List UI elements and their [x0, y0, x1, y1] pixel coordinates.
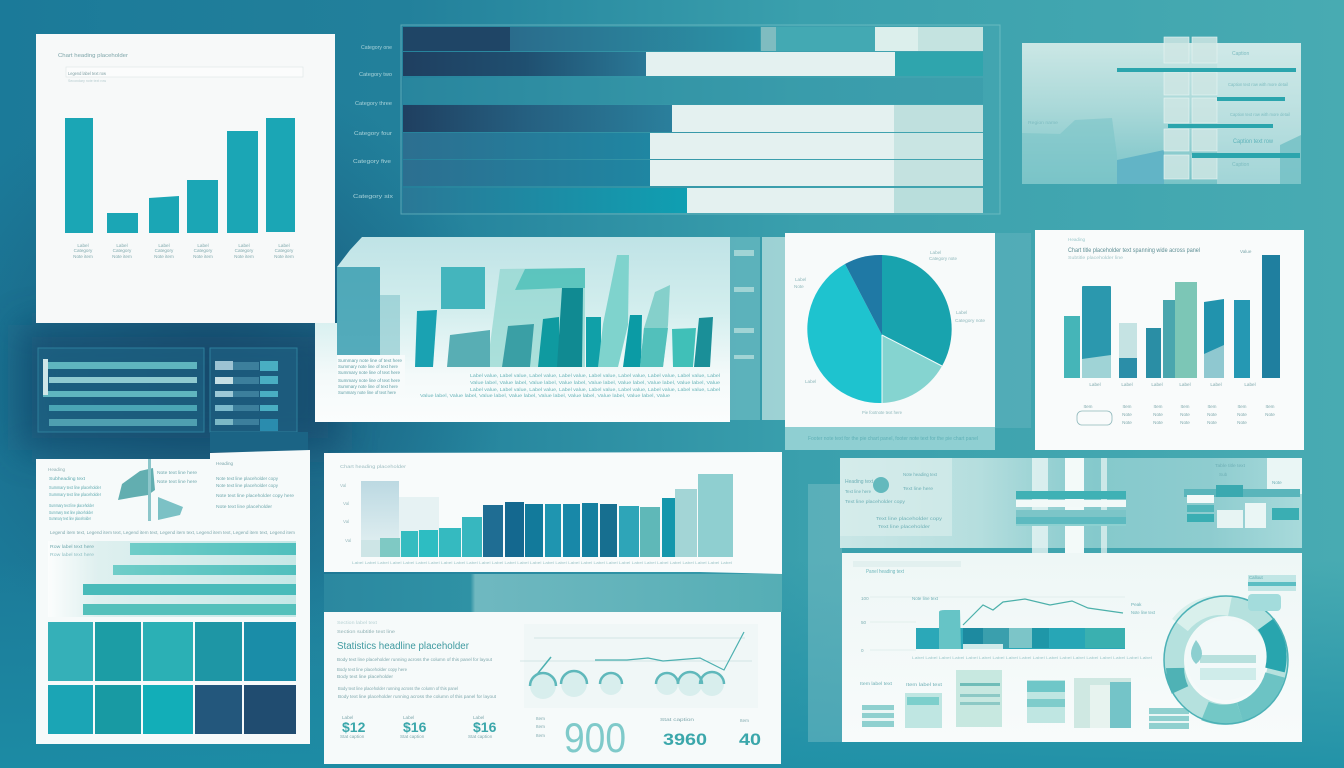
intro text: Heading — [48, 467, 66, 472]
axis captions: Label — [1089, 382, 1101, 387]
stat captions: Item — [536, 724, 545, 729]
mini table right — [1184, 485, 1300, 528]
table text: Note — [1272, 480, 1282, 485]
axis captions: Item — [1266, 404, 1275, 409]
globe icon — [873, 477, 889, 493]
axis captions: Item — [1208, 404, 1217, 409]
line chart — [520, 632, 752, 683]
intro text: Summary text line placeholder — [49, 492, 101, 497]
panel: middle wide column chart — [324, 452, 782, 574]
columns — [361, 474, 733, 557]
axis captions: Note — [1180, 420, 1190, 425]
column value labels: Value label, Value label, Value label, Value label, Value label, Value label, Value label, Value label, Value — [470, 380, 721, 385]
text note: Summary note line of text here — [338, 358, 403, 363]
table text: Text line here — [903, 486, 933, 491]
side notes: Note text line placeholder copy — [216, 476, 279, 481]
axis captions: Note — [1207, 412, 1217, 417]
pie labels: Label — [956, 310, 967, 315]
table text: Sub — [1219, 472, 1228, 477]
axis captions: Item — [1123, 404, 1132, 409]
intro text: Summary text line placeholder — [49, 516, 91, 521]
headline: Statistics headline placeholder — [337, 641, 470, 652]
tall column — [939, 610, 961, 649]
y labels: Val — [343, 501, 349, 506]
stat captions: Stat caption — [660, 717, 695, 722]
axis captions: Label — [1121, 382, 1133, 387]
swatch grid — [48, 622, 296, 734]
y labels — [861, 596, 869, 653]
row labels: Category four — [354, 131, 392, 137]
row labels: Category two — [359, 72, 392, 78]
axis captions: Note — [1153, 420, 1163, 425]
line labels: Label Label Label Label Label Label Label Label Label Label Label Label Label Label Label Label Label Label — [912, 655, 1152, 660]
axis captions: Label — [1244, 382, 1256, 387]
stat figures — [342, 719, 761, 749]
row 2 — [403, 52, 983, 76]
horizontal bars — [48, 541, 296, 617]
captions: Caption — [1232, 162, 1249, 168]
pie labels: Category note — [955, 318, 985, 323]
row labels: Category three — [355, 101, 392, 107]
body text: Body text line placeholder — [337, 674, 393, 679]
y labels: 100 — [861, 596, 869, 601]
translucent strip beside pie — [730, 237, 785, 420]
pie labels: Label — [805, 379, 816, 384]
panel: middle wide column chart: Chart heading placeholder — [340, 464, 407, 469]
intro text: Summary text line placeholder — [49, 503, 94, 508]
column captions: Label — [77, 243, 89, 248]
ghost bars — [361, 481, 399, 557]
row 3 — [403, 78, 983, 104]
headline: Section subtitle text line — [337, 629, 396, 634]
trend line — [963, 599, 1123, 625]
panel: bottom-right dashboard — [842, 553, 1302, 742]
body text: Body text line placeholder copy here — [337, 667, 407, 672]
axis captions: Label — [1151, 382, 1163, 387]
table text: Heading text — [845, 479, 873, 485]
large numerals: 900 — [564, 714, 626, 761]
line labels — [860, 596, 1156, 687]
axis captions: Note — [1122, 412, 1132, 417]
row labels: Category five — [353, 159, 391, 165]
column value labels: Value label, Value label, Value label, Value label, Value label, Value label, Value label, Value label, Value — [420, 393, 671, 398]
stat captions: Stat caption — [468, 734, 493, 739]
panel: right grouped column chart — [1035, 230, 1304, 450]
map icon — [118, 459, 183, 521]
stat captions: Item — [536, 733, 545, 738]
pie labels: Category note — [929, 256, 957, 261]
columns — [415, 255, 713, 367]
pie labels — [794, 250, 985, 415]
body text: Body text line placeholder running across the column of this panel — [338, 686, 458, 691]
stat figures: 3960 — [663, 730, 707, 749]
y labels: 50 — [861, 620, 867, 625]
row labels: Category six — [353, 194, 393, 200]
callouts: Callout — [1249, 575, 1263, 580]
legend box — [66, 67, 303, 83]
axis captions: Note — [1237, 412, 1247, 417]
stat figures: $16 — [473, 719, 497, 735]
legend row: Legend item text, Legend item text, Legend item text, Legend item text, Legend item text, Legend item text, Legend item — [50, 530, 295, 535]
stat figures: $12 — [342, 719, 366, 735]
column captions: Label — [238, 243, 250, 248]
side notes: Note text line here — [157, 470, 197, 475]
axis captions: Item — [1181, 404, 1190, 409]
stacked band — [916, 628, 1125, 649]
teal rule bars — [1117, 68, 1300, 158]
y labels: Val — [343, 519, 349, 524]
axis captions: Note — [1180, 412, 1190, 417]
panel: right translucent table — [808, 458, 1302, 742]
axis captions: Note — [1153, 412, 1163, 417]
pie labels: Pie footnote text here — [862, 410, 902, 415]
column captions: Label — [197, 243, 209, 248]
panel: top-left column chart — [36, 34, 335, 323]
heading: Panel heading text — [866, 569, 905, 575]
axis captions — [1084, 382, 1275, 425]
text note — [337, 355, 405, 395]
callouts — [1248, 575, 1296, 611]
legend square — [441, 267, 485, 309]
stat figures: 40 — [739, 730, 761, 749]
pie wedges — [807, 255, 952, 403]
stat captions: Label — [473, 715, 484, 720]
column captions: Category — [155, 248, 174, 253]
axis captions: Note — [1207, 420, 1217, 425]
body text — [337, 657, 497, 699]
stat captions: Stat caption — [340, 734, 365, 739]
column value labels — [420, 373, 721, 398]
y labels: 0 — [861, 648, 864, 653]
headline: Section label text — [337, 620, 378, 625]
heading: Chart title placeholder text spanning wide across panel — [1068, 248, 1200, 254]
heading — [1068, 237, 1252, 260]
table text: Table title text — [1215, 463, 1246, 468]
map shapes — [1022, 43, 1301, 184]
stat captions: Label — [342, 715, 353, 720]
side block — [337, 267, 380, 355]
table text: Text line placeholder copy — [876, 516, 943, 521]
column captions: Note item — [154, 254, 174, 259]
line labels: Note line text — [912, 596, 939, 601]
line chart backdrop — [524, 624, 758, 708]
stat captions: Label — [403, 715, 414, 720]
text note: Summary note line of text here — [338, 370, 401, 375]
column captions: Category — [194, 248, 213, 253]
panel: small dark swatch table — [210, 348, 308, 452]
horizontal bars: Row label text here — [50, 544, 94, 549]
captions: Caption text row — [1233, 138, 1273, 145]
column captions: Category — [113, 248, 132, 253]
line labels: Peak — [1131, 602, 1142, 607]
table text — [845, 463, 1282, 529]
band between middle panels — [324, 574, 782, 612]
side notes: Heading — [216, 461, 234, 466]
column captions: Note item — [234, 254, 254, 259]
row labels — [353, 45, 393, 200]
arch icons — [530, 671, 724, 699]
side notes: Note text line placeholder copy — [216, 483, 279, 488]
row 5 — [403, 133, 983, 159]
text note: Summary note line of text here — [338, 364, 399, 369]
captions — [1028, 51, 1290, 168]
axis captions: Note — [1122, 420, 1132, 425]
bars — [1064, 255, 1280, 378]
column captions: Category — [74, 248, 93, 253]
headline — [337, 620, 470, 652]
column captions: Category — [235, 248, 254, 253]
panel: lower-middle statistics — [324, 612, 781, 764]
side notes: Note text line placeholder — [216, 504, 273, 509]
panel: top-right translucent map table — [1022, 37, 1301, 184]
y labels: Val — [345, 538, 351, 543]
text note: Summary note line of text here — [338, 378, 401, 383]
columns overlay — [1016, 458, 1126, 556]
line labels: Item label text — [906, 682, 943, 687]
y labels — [340, 483, 351, 543]
captions: Caption text row with more detail — [1230, 112, 1290, 117]
line labels: Item label text — [860, 681, 893, 686]
pie labels: Label — [930, 250, 941, 255]
panel: pie chart — [785, 233, 1031, 450]
heading: Subtitle placeholder line — [1068, 255, 1123, 260]
captions: Region name — [1028, 120, 1059, 125]
row 1 — [403, 27, 983, 51]
pie footer: Footer note text for the pie chart panel, footer note text for the pie chart panel — [808, 436, 978, 442]
legend box: Legend label text row — [68, 71, 107, 76]
panel: layered translucent column chart — [315, 237, 730, 422]
captions: Caption text row with more detail — [1228, 82, 1288, 87]
column captions: Label — [278, 243, 290, 248]
intro text: Subheading text — [49, 476, 86, 481]
lower boxes — [862, 670, 1189, 729]
column captions: Note item — [112, 254, 132, 259]
column captions: Note item — [73, 254, 93, 259]
horizontal bars: Row label text here — [50, 552, 94, 557]
intro text: Summary text line placeholder — [49, 485, 101, 490]
heading: Heading — [1068, 237, 1086, 242]
grid lines — [870, 597, 1125, 650]
stat captions — [340, 715, 749, 739]
column captions: Note item — [193, 254, 213, 259]
column captions: Label — [158, 243, 170, 248]
stat captions: Item — [536, 716, 545, 721]
table text: Text line here — [845, 489, 871, 494]
axis captions: Label — [1179, 382, 1191, 387]
ring chart — [1164, 596, 1288, 724]
stat figures: $16 — [403, 719, 427, 735]
stat captions: Item — [740, 718, 749, 723]
line labels: Note line text — [1131, 610, 1156, 615]
table text: Text line placeholder — [878, 524, 931, 529]
axis captions: Label — [1210, 382, 1222, 387]
x axis captions: Label Label Label Label Label Label Label Label Label Label Label Label Label Label Label Label Label Label Label Label Label Label Label Label Label Label Label Label Label Label — [352, 560, 732, 565]
side notes: Note text line placeholder copy here — [216, 493, 294, 498]
captions: Caption — [1232, 51, 1249, 57]
pill badge — [1077, 411, 1112, 425]
column captions — [73, 243, 294, 259]
side notes — [157, 461, 294, 509]
stat captions: Stat caption — [400, 734, 425, 739]
row 4 — [403, 105, 983, 132]
pie labels: Label — [795, 277, 806, 282]
axis captions: Item — [1154, 404, 1163, 409]
axis captions: Note — [1237, 420, 1247, 425]
pie labels: Note — [794, 284, 804, 289]
column captions: Note item — [274, 254, 294, 259]
heading — [853, 561, 961, 575]
axis captions: Item — [1238, 404, 1247, 409]
intro text: Summary text line placeholder — [49, 510, 93, 515]
side notes: Note text line here — [157, 479, 197, 484]
column value labels: Label value, Label value, Label value, Label value, Label value, Label value, Label value, Label value, Label — [470, 373, 720, 378]
row labels: Category one — [361, 45, 392, 51]
chart heading: Chart heading placeholder — [58, 53, 128, 59]
y labels: Val — [340, 483, 346, 488]
table text: Note heading text — [903, 472, 938, 477]
panel: stacked horizontal bars — [353, 25, 1000, 214]
panel: small dark horizontal bars — [38, 348, 204, 432]
column captions: Label — [116, 243, 128, 248]
panel: bottom-left report — [36, 450, 310, 744]
axis captions: Item — [1084, 404, 1093, 409]
icon card column — [1164, 37, 1217, 179]
heading: Value — [1240, 249, 1252, 254]
table text: Text line placeholder copy — [845, 499, 906, 504]
body text: Body text line placeholder running across the column of this panel for layout — [337, 657, 493, 662]
column bars — [65, 118, 295, 233]
axis captions: Note — [1265, 412, 1275, 417]
legend box: Secondary note text row — [68, 78, 106, 83]
intro text — [48, 467, 101, 521]
text note: Summary note line of text here — [338, 390, 397, 395]
text note: Summary note line of text here — [338, 384, 399, 389]
row 6 — [403, 160, 983, 186]
column value labels: Label value, Label value, Label value, Label value, Label value, Label value, Label value, Label value, Label — [470, 387, 720, 392]
body text: Body text line placeholder running across the column of this panel for layout — [338, 694, 497, 699]
column captions: Category — [275, 248, 294, 253]
row 7 — [403, 188, 983, 213]
